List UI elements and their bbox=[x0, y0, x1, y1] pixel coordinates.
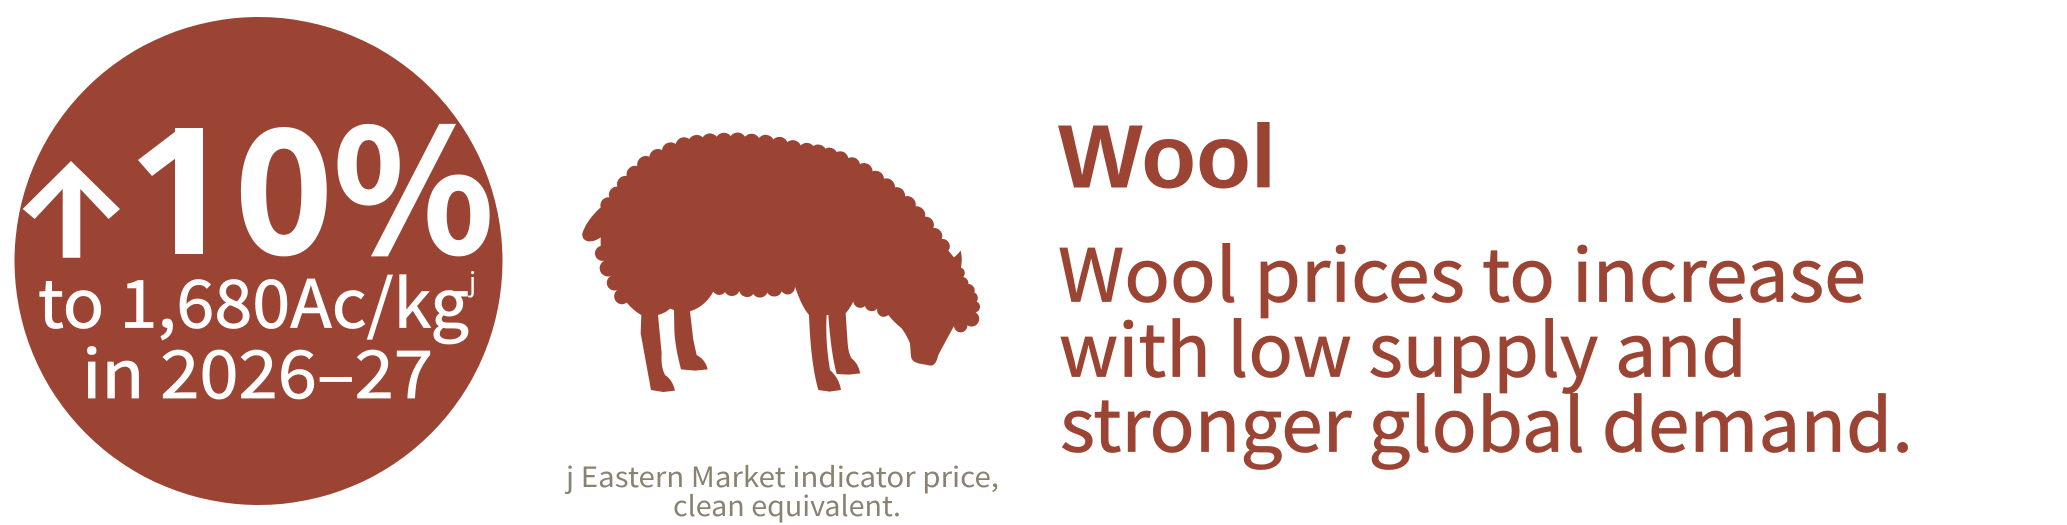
description line 3: stronger global demand. bbox=[1060, 368, 1913, 474]
icon: up arrow bbox=[23, 161, 120, 258]
icon: grazing sheep silhouette bbox=[582, 133, 980, 392]
headline figure: 10%: 10% bbox=[136, 56, 494, 302]
text block: description bbox=[1058, 218, 1913, 474]
numeral one foot and flag shaping bbox=[138, 122, 229, 258]
footnote line 1: j Eastern Market indicator price, bbox=[564, 456, 999, 496]
price text: to 1,680Ac/kg bbox=[38, 252, 469, 348]
description line 2: with low supply and bbox=[1059, 293, 1747, 399]
circle background bbox=[14, 17, 502, 505]
heading: Wool: Wool bbox=[1058, 107, 1276, 207]
description line 1: Wool prices to increase bbox=[1058, 218, 1866, 324]
year text: in 2026–27 bbox=[82, 322, 433, 418]
panel: price forecast circle bbox=[14, 17, 502, 505]
footnote marker j: j bbox=[467, 262, 476, 299]
footnote bbox=[564, 456, 999, 525]
footnote line 2: clean equivalent. bbox=[673, 485, 901, 525]
